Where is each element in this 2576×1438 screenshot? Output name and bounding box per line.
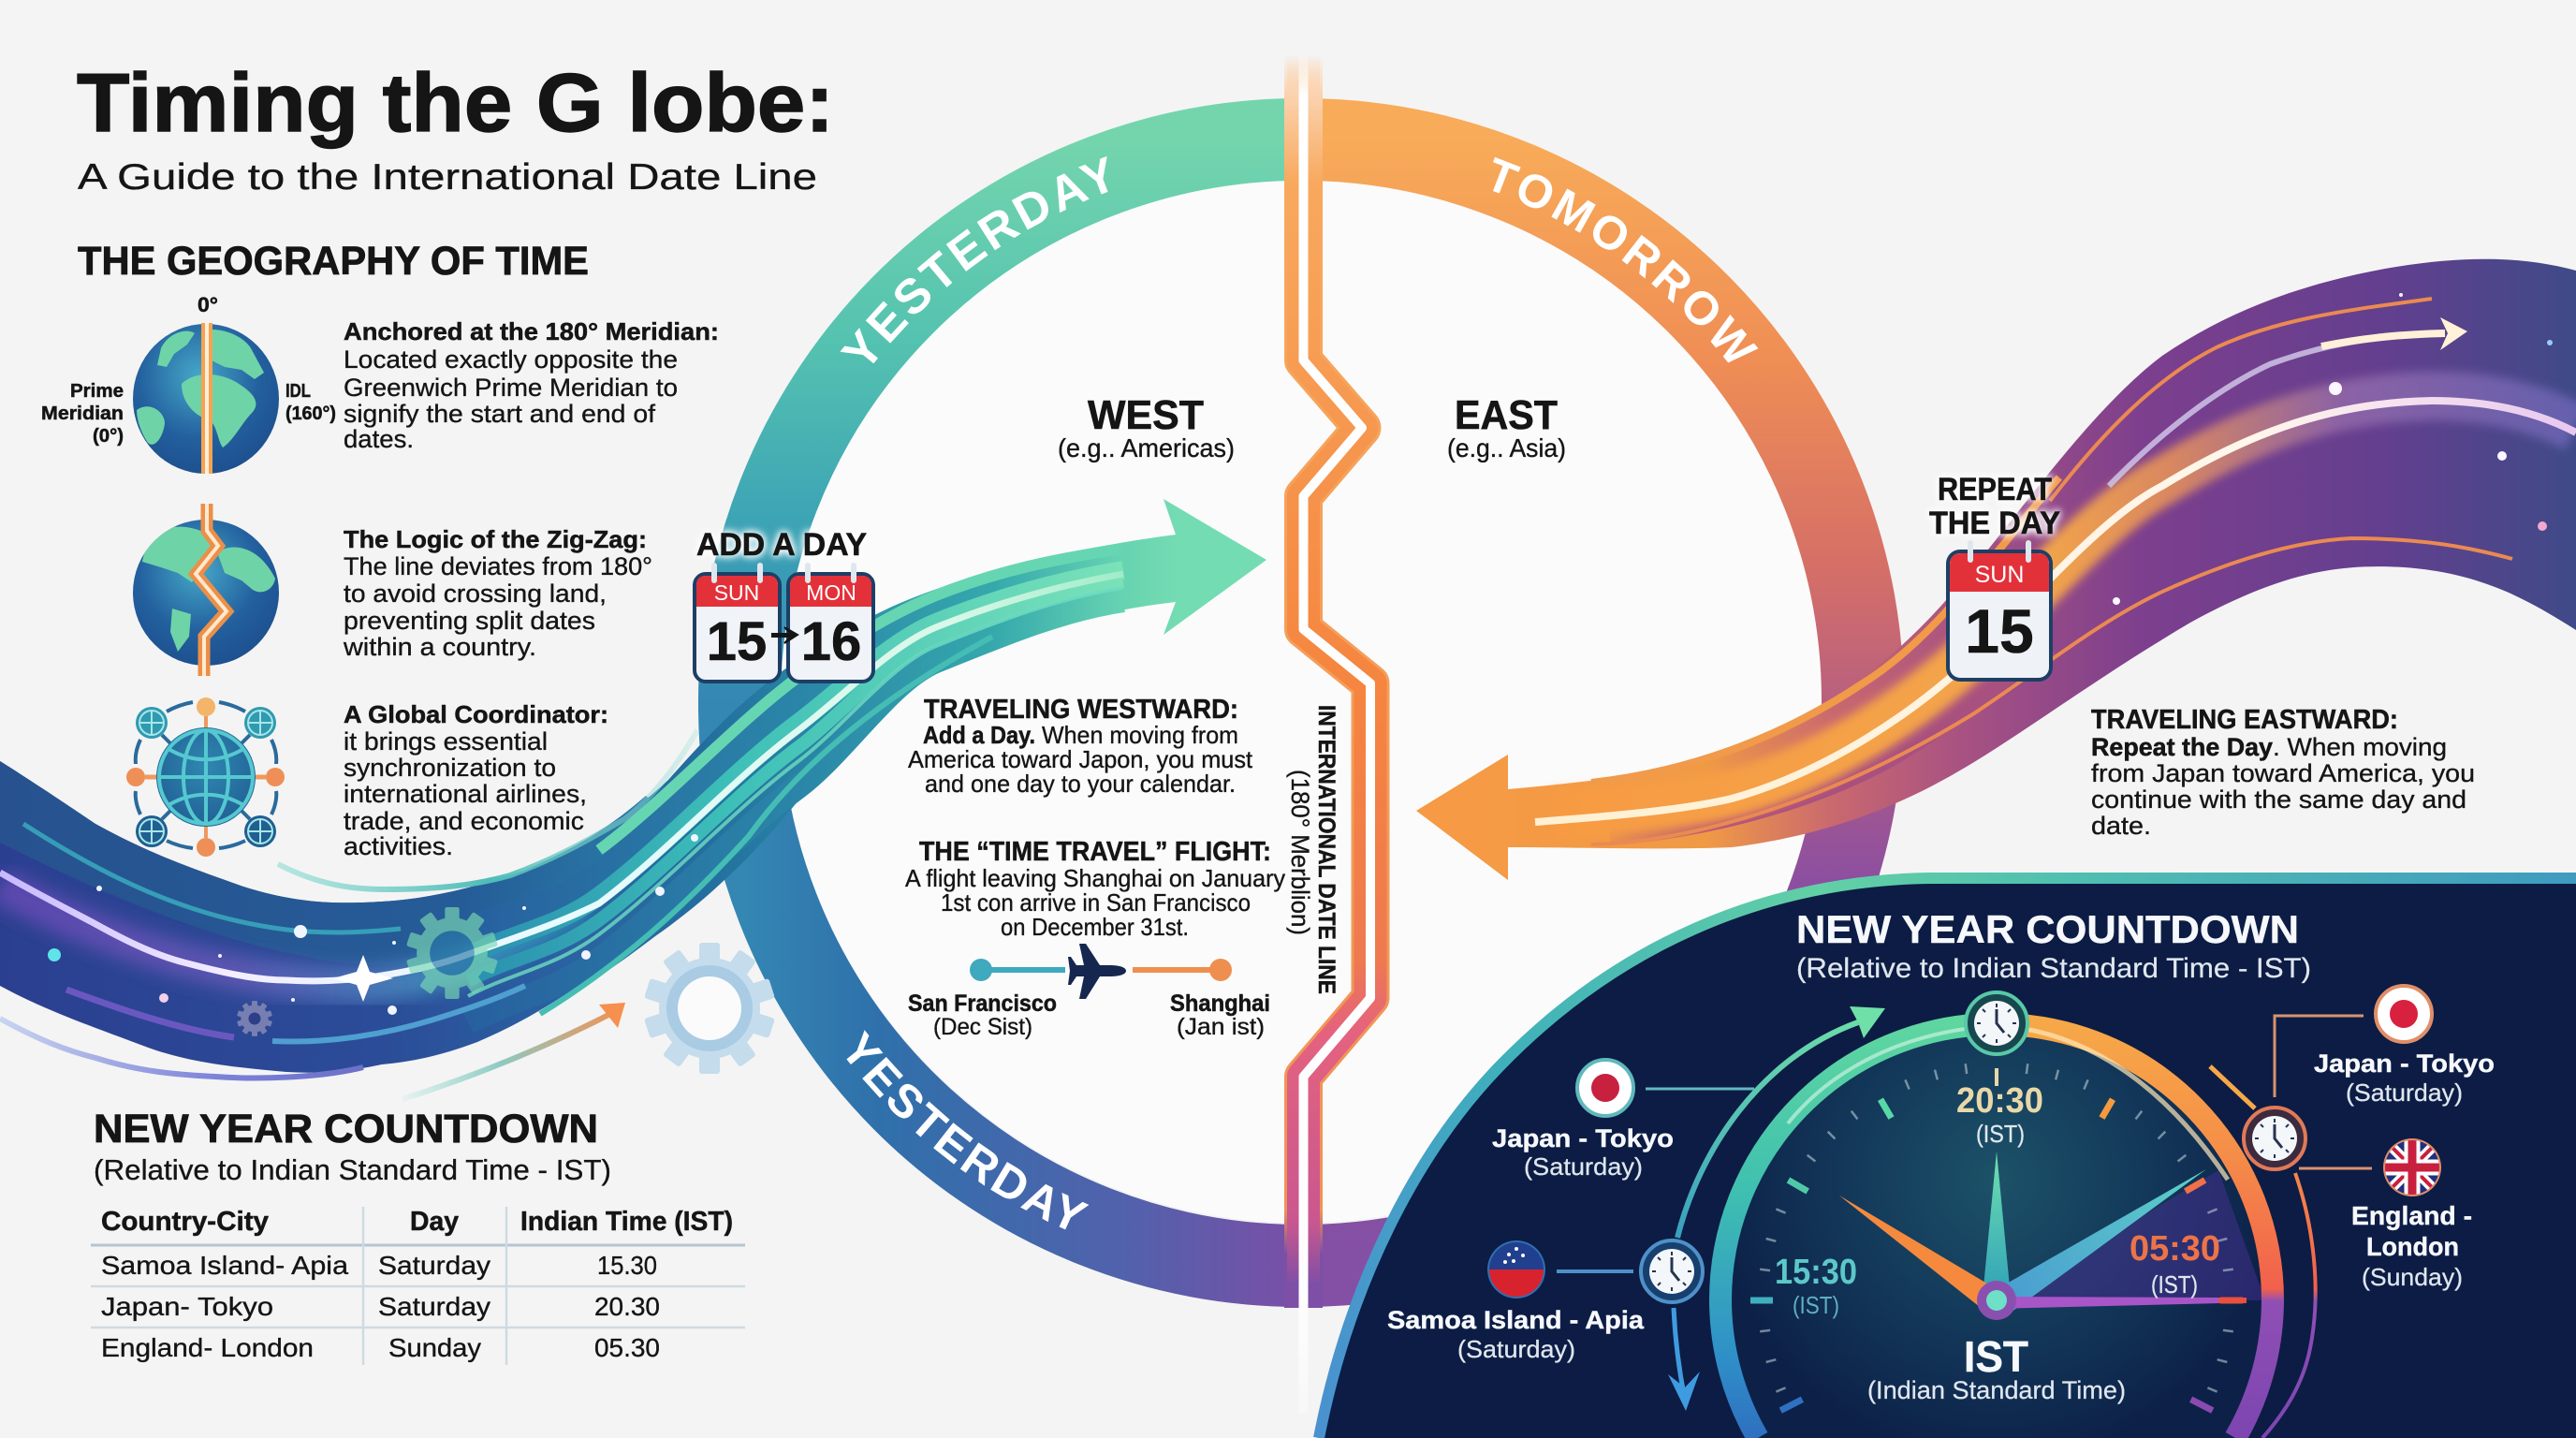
label: samoa apia <box>1387 1306 1645 1363</box>
label: ist center: IST <box>1964 1332 2028 1381</box>
panel: dark countdown clock <box>1319 878 2576 1438</box>
gear: small grey <box>237 1001 272 1036</box>
label: yesterday bottom: YESTERDAY <box>846 1030 1090 1230</box>
clock outer arcs <box>1720 1024 2316 1438</box>
east label: (e.g.. Asia) <box>1447 433 1566 462</box>
major ticks <box>1750 1068 2243 1411</box>
text block: zig-zag: within a country. <box>343 633 536 661</box>
table: countdown times: Samoa Island- Apia <box>101 1251 348 1280</box>
text block: zig-zag: The line deviates from 180° <box>344 552 652 580</box>
subheading: panel relative to ist: (Relative to Indian Standard Time - IST) <box>1796 953 2311 984</box>
sparkle dots <box>2113 293 2553 605</box>
label: shanghai: (Jan ist) <box>1177 1014 1265 1040</box>
connectors <box>1557 1016 2372 1271</box>
time: 05:30: 05:30 <box>2130 1229 2220 1269</box>
glowing purple band <box>0 885 580 985</box>
flag: japan right <box>2376 986 2432 1042</box>
text block: coordinator: A Global Coordinator: <box>344 700 608 728</box>
text block: coordinator: trade, and economic <box>344 807 584 835</box>
table: countdown times: Japan- Tokyo <box>101 1292 273 1321</box>
text block: time travel flight <box>905 837 1285 941</box>
table: countdown times: Saturday <box>378 1251 490 1280</box>
text block: zig-zag: preventing split dates <box>344 607 595 635</box>
text block: coordinator: international airlines, <box>344 780 587 808</box>
upper band <box>0 761 674 965</box>
orange accent lines <box>1591 299 2512 844</box>
west label <box>1058 392 1235 462</box>
time: 05:30: (IST) <box>2151 1270 2198 1299</box>
icon: global network <box>126 697 285 857</box>
text block: anchored: Located exactly opposite the <box>344 345 678 374</box>
text block: zig-zag: to avoid crossing land, <box>344 580 607 608</box>
flag: united kingdom <box>2383 1138 2441 1196</box>
label: japan tokyo right: (Saturday) <box>2346 1078 2463 1107</box>
ribbon body <box>0 499 1266 1073</box>
vertical date line label: (180° Merblion) <box>1286 770 1314 935</box>
label: england london: London <box>2366 1232 2459 1261</box>
label: san francisco <box>908 990 1057 1040</box>
orange trend arrow <box>402 1003 625 1099</box>
text block: traveling eastward: continue with the same day and <box>2091 785 2466 814</box>
label: samoa apia: (Saturday) <box>1457 1335 1575 1363</box>
time: 15:30 <box>1775 1253 1857 1319</box>
vertical date line label: INTERNATIONAL DATE LINE <box>1313 705 1339 994</box>
label: japan tokyo right <box>2314 1049 2495 1107</box>
calendar: mon 16 <box>788 565 873 682</box>
table: countdown times: Day <box>410 1207 459 1237</box>
label: san francisco: (Dec Sist) <box>933 1014 1032 1040</box>
table: countdown times: England- London <box>101 1333 314 1362</box>
pale progress arrow <box>2109 317 2467 486</box>
gear: teal on ribbon <box>406 907 498 999</box>
westward ribbon arrow <box>0 499 1266 1073</box>
label: 0 degrees: 0° <box>198 293 218 316</box>
repeat the day heading: REPEAT <box>1938 472 2052 507</box>
text block: traveling westward: When moving from <box>1042 721 1238 749</box>
icon: globe with zig-zag <box>133 504 279 676</box>
dial ticks <box>1760 1064 2233 1392</box>
vertical date line label <box>1286 705 1339 994</box>
arrow between calendars <box>772 627 798 643</box>
text block: traveling westward: and one day to your calendar. <box>925 770 1236 798</box>
time: 20:30: 20:30 <box>1956 1081 2043 1121</box>
teal stripes <box>23 549 1123 1042</box>
label: japan tokyo left <box>1492 1124 1674 1181</box>
time: 20:30: (IST) <box>1976 1120 2025 1148</box>
time: 20:30 <box>1956 1081 2043 1148</box>
text block: zig-zag <box>343 525 652 661</box>
heading: left new year countdown: NEW YEAR COUNTDOWN <box>94 1107 598 1152</box>
text block: traveling westward: TRAVELING WESTWARD: <box>924 695 1238 725</box>
subheading: left relative to ist: (Relative to Indian Standard Time - IST) <box>94 1153 611 1186</box>
icon: airplane <box>1068 944 1126 999</box>
label: idl: IDL <box>285 381 311 402</box>
table: countdown times: 05.30 <box>594 1333 660 1362</box>
calendar: sun 15 <box>695 565 780 682</box>
eastward ribbon arrow <box>1416 259 2576 880</box>
calendar: sun 15 repeat: SUN <box>1975 562 2024 588</box>
west label: WEST <box>1088 392 1204 438</box>
west label: (e.g.. Americas) <box>1058 433 1235 462</box>
text block: time travel flight: 1st con arrive in San Francisco <box>941 888 1251 917</box>
label: japan tokyo left: Japan - Tokyo <box>1492 1124 1674 1152</box>
label: idl: (160°) <box>285 404 336 424</box>
label: prime meridian: (0°) <box>93 426 124 447</box>
text block: traveling eastward: TRAVELING EASTWARD: <box>2091 705 2398 735</box>
add a day heading: ADD A DAY <box>696 527 867 563</box>
text block: coordinator: synchronization to <box>344 754 556 782</box>
calendar: sun 15: SUN <box>714 580 759 605</box>
text block: traveling eastward: from Japan toward America, you <box>2091 759 2475 787</box>
text block: time travel flight: THE “TIME TRAVEL” FLIGHT: <box>919 837 1271 867</box>
text block: traveling westward: America toward Japon, you must <box>908 745 1253 773</box>
flight route <box>970 944 1232 999</box>
outer arrow: toward tokyo <box>1677 1006 1885 1238</box>
calendar: sun 15 repeat: 15 <box>1965 596 2034 666</box>
label: england london: England - <box>2351 1201 2472 1230</box>
table: countdown times: 15.30 <box>597 1251 657 1280</box>
calendar: mon 16: 16 <box>801 611 861 672</box>
label: prime meridian: Meridian <box>41 404 124 424</box>
text block: coordinator: it brings essential <box>344 727 548 756</box>
table: countdown times: Sunday <box>388 1333 481 1362</box>
text block: anchored <box>344 317 719 453</box>
label: japan tokyo right: Japan - Tokyo <box>2314 1049 2495 1078</box>
text block: anchored: dates. <box>344 425 414 453</box>
clock dial <box>1720 1023 2316 1438</box>
text block: coordinator: activities. <box>344 832 453 860</box>
bright light line <box>0 574 1123 981</box>
repeat the day heading <box>1929 472 2060 541</box>
orange core band <box>1554 396 2576 814</box>
heading: geography of time: THE GEOGRAPHY OF TIME <box>78 239 589 284</box>
label: prime meridian: Prime <box>70 381 124 402</box>
time: 15:30: (IST) <box>1793 1291 1839 1319</box>
flag: samoa <box>1487 1240 1545 1299</box>
ring: yesterday and tomorrow zones <box>739 139 1863 1268</box>
label: prime meridian <box>41 381 124 447</box>
subtitle: A Guide to the International Date Line <box>78 157 817 198</box>
text block: anchored: signify the start and end of <box>344 400 656 428</box>
text block: traveling eastward: . When moving <box>2273 733 2447 761</box>
east label: EAST <box>1455 392 1558 438</box>
thin swooshes near ribbon <box>0 730 697 1078</box>
label: tomorrow: TOMORROW <box>1493 157 1758 363</box>
magenta stripe <box>1610 646 2050 835</box>
label: england london <box>2351 1201 2472 1291</box>
text block: time travel flight: on December 31st. <box>1001 913 1189 941</box>
label: japan tokyo left: (Saturday) <box>1524 1152 1643 1181</box>
table: countdown times: Indian Time (IST) <box>520 1207 733 1237</box>
text block: traveling eastward: Repeat the Day <box>2091 733 2273 761</box>
icon: clock left <box>1641 1240 1703 1302</box>
table: countdown times <box>91 1207 745 1365</box>
outer arrow: down <box>1668 1308 1700 1411</box>
label: england london: (Sunday) <box>2362 1263 2463 1291</box>
text block: traveling westward: Add a Day. <box>923 721 1035 749</box>
time: 15:30: 15:30 <box>1775 1253 1857 1292</box>
label: yesterday top: YESTERDAY <box>841 155 1108 363</box>
text block: zig-zag: The Logic of the Zig-Zag: <box>344 525 647 553</box>
text block: time travel flight: A flight leaving Shanghai on January <box>905 864 1285 892</box>
wedge highlight <box>2003 1170 2265 1300</box>
flag: japan left <box>1577 1060 1633 1116</box>
icon: clock top <box>1966 992 2027 1054</box>
label: ist center: (Indian Standard Time) <box>1867 1376 2126 1404</box>
sparkle <box>333 955 393 1002</box>
label: samoa apia: Samoa Island - Apia <box>1387 1306 1645 1334</box>
international date line <box>1303 56 1370 1414</box>
text block: coordinator <box>344 700 608 860</box>
text block: traveling eastward: date. <box>2091 812 2151 840</box>
text block: traveling westward <box>908 695 1253 798</box>
label: idl <box>285 381 336 424</box>
label: shanghai <box>1170 990 1270 1040</box>
cream light line <box>1535 401 2576 822</box>
label: shanghai: Shanghai <box>1170 990 1270 1017</box>
repeat the day heading: THE DAY <box>1929 506 2060 541</box>
sparkle dots <box>48 834 698 1015</box>
text block: anchored: Anchored at the 180° Meridian: <box>344 317 719 345</box>
clock hands <box>1839 1152 2247 1320</box>
time: 05:30 <box>2130 1229 2220 1299</box>
gear: large light <box>644 943 775 1074</box>
table: countdown times: Country-City <box>101 1207 269 1237</box>
ribbon body <box>1416 259 2576 880</box>
table: countdown times: Saturday <box>378 1292 490 1321</box>
heading: panel new year countdown: NEW YEAR COUNTDOWN <box>1796 907 2299 951</box>
text block: traveling eastward <box>2091 705 2475 840</box>
calendar: sun 15 repeat <box>1948 543 2051 680</box>
calendar: sun 15: 15 <box>707 611 767 672</box>
label: ist center <box>1867 1332 2126 1404</box>
table: countdown times: 20.30 <box>594 1292 660 1321</box>
icon: globe with meridian <box>133 323 279 474</box>
text block: anchored: Greenwich Prime Meridian to <box>344 374 678 402</box>
calendar: mon 16: MON <box>806 580 856 605</box>
east label <box>1447 392 1566 462</box>
title: Timing the G lobe: <box>77 56 834 149</box>
icon: clock right <box>2244 1108 2305 1169</box>
label: san francisco: San Francisco <box>908 990 1057 1017</box>
